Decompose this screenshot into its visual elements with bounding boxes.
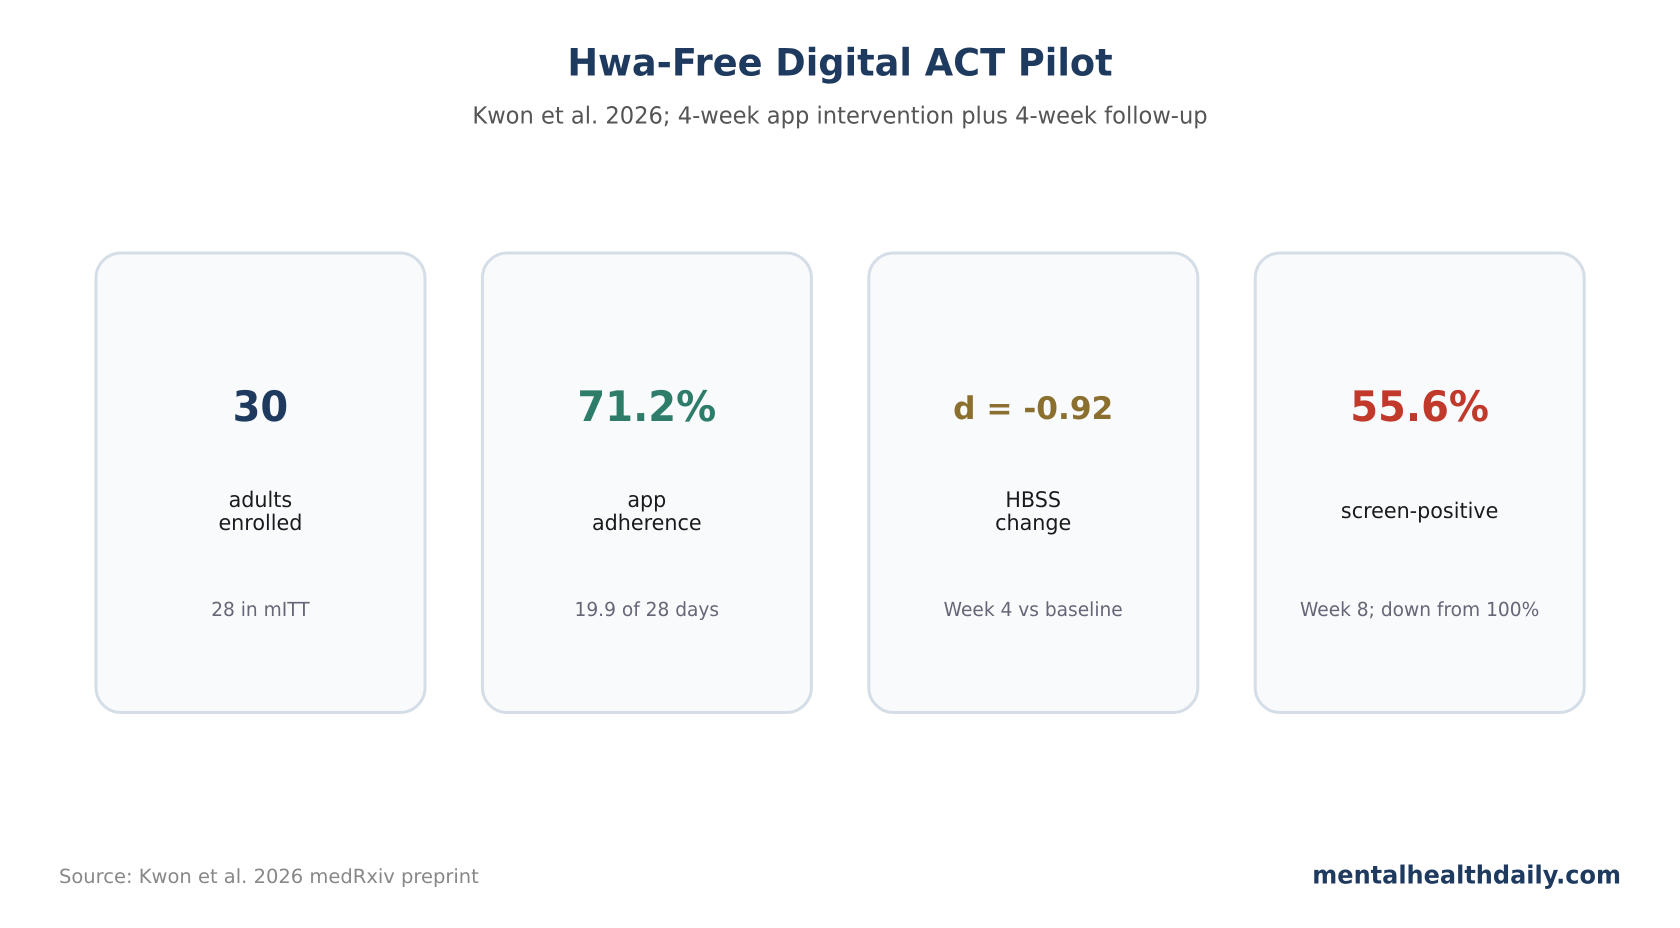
stat: 30: 30: [233, 383, 288, 431]
note: week 8: Week 8; down from 100%: [1300, 599, 1539, 621]
label: HBSS change: HBSS: [1005, 487, 1061, 512]
label: adults enrolled: adults: [229, 487, 292, 512]
stat: 55.6%: 55.6%: [1350, 383, 1489, 431]
brand: mentalhealthdaily.com: [1312, 861, 1621, 890]
label: HBSS change: change: [995, 510, 1071, 535]
label: app adherence: adherence: [592, 510, 702, 535]
label: screen-positive: screen-positive: [1341, 498, 1498, 523]
label: app adherence: app: [627, 487, 666, 512]
panel: app adherence: [482, 253, 811, 712]
panel: screen-positive: [1255, 253, 1584, 712]
subtitle: Kwon et al. 2026; 4-week app intervention plus 4-week follow-up: [472, 103, 1208, 130]
title: Hwa-Free Digital ACT Pilot: [567, 40, 1113, 85]
note: 19.9 of 28 days: 19.9 of 28 days: [574, 599, 719, 621]
note: week 4 vs baseline: Week 4 vs baseline: [944, 599, 1123, 621]
stat: 71.2%: 71.2%: [577, 383, 716, 431]
note: 28 in mITT: 28 in mITT: [211, 599, 310, 621]
panel: HBSS change: [869, 253, 1198, 712]
label: adults enrolled: enrolled: [218, 510, 302, 535]
source note: Source: Kwon et al. 2026 medRxiv preprint: [59, 865, 479, 888]
stat: d = -0.92: d = -0.92: [953, 391, 1113, 427]
panel: adults enrolled: [96, 253, 425, 712]
